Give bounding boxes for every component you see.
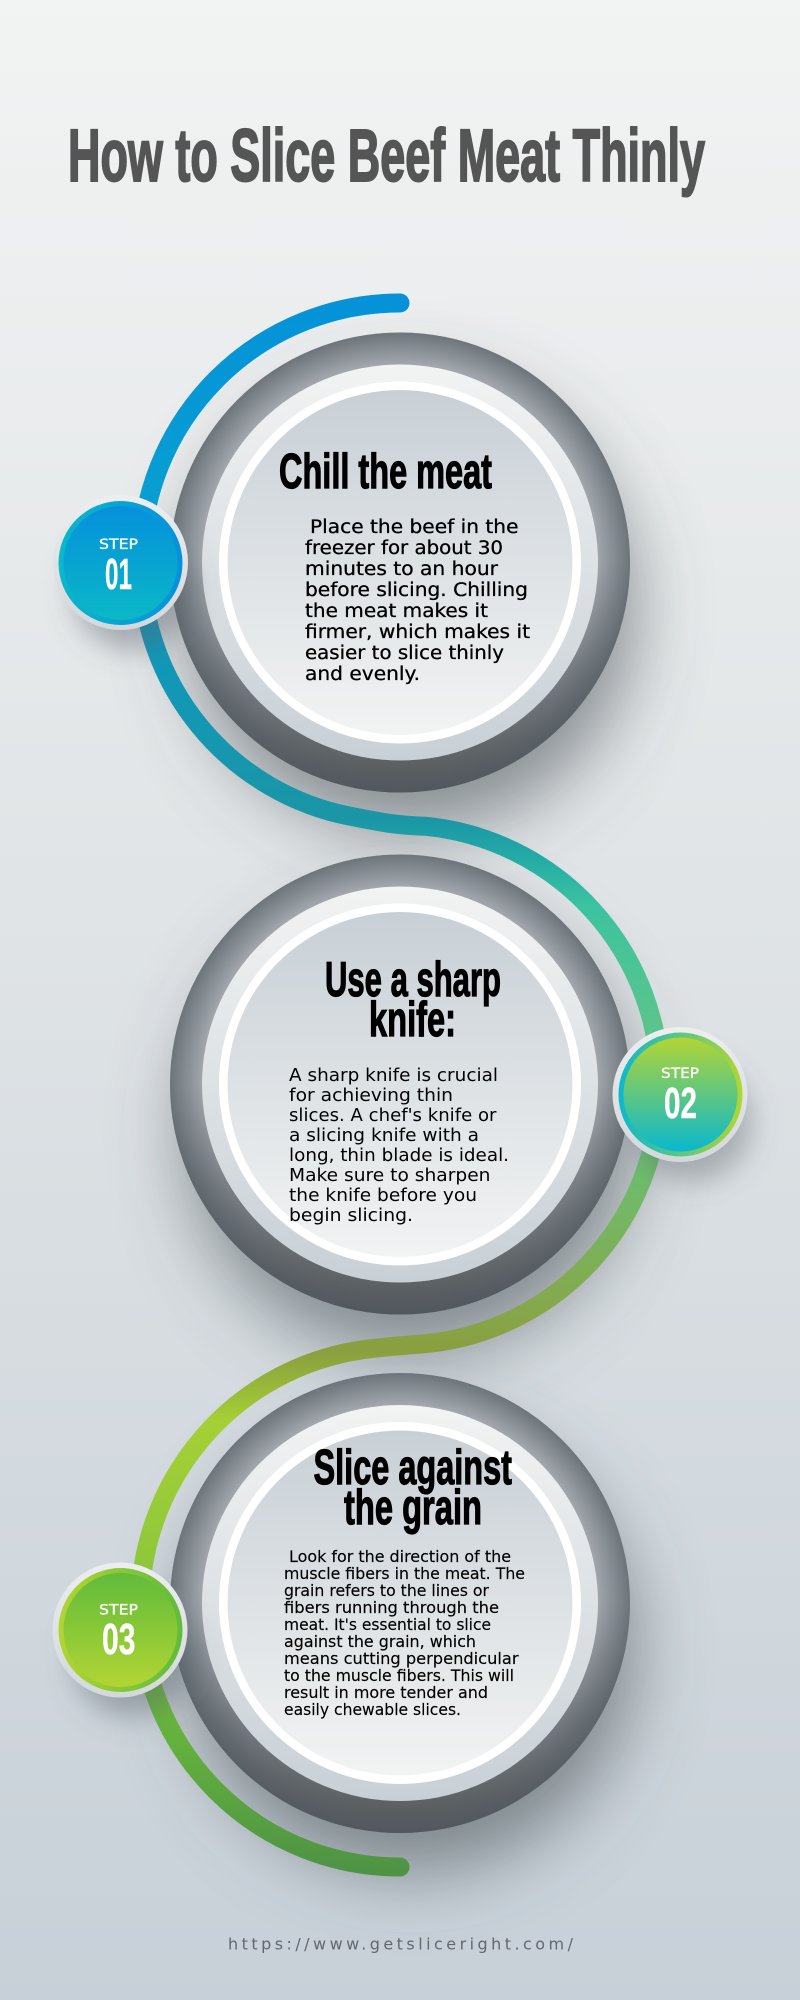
body text 2: slices. A chef's knife or (289, 1105, 497, 1126)
heading 2: knife: (369, 993, 456, 1047)
badge: step 03: STEP (99, 1602, 138, 1618)
panel: step 3 slice against the grain (170, 1373, 630, 1833)
inner disc 3 (228, 1430, 572, 1776)
body text 1: the meat makes it (305, 601, 488, 622)
outer ring 3 (170, 1373, 630, 1833)
body text 2: A sharp knife is crucial (289, 1065, 498, 1086)
panel: step 2 use a sharp knife (170, 854, 630, 1314)
body text 1 (305, 517, 530, 685)
white ring 3 (219, 1422, 581, 1784)
panel: step 1 chill the meat (170, 332, 630, 792)
body text 2: a slicing knife with a (289, 1125, 479, 1146)
heading 2 (325, 953, 501, 1047)
white ring 1 (219, 382, 581, 744)
middle ring 2 (202, 886, 598, 1282)
body text 1: freezer for about 30 (305, 538, 503, 559)
body text 3 (284, 1547, 525, 1719)
body text 2: begin slicing. (289, 1205, 413, 1226)
body text 1: and evenly. (305, 664, 420, 685)
body text 3: fibers running through the (284, 1598, 499, 1617)
badge: step 02 (612, 1027, 752, 1182)
body text 3: against the grain, which (284, 1632, 476, 1651)
inner disc 2 (228, 912, 572, 1257)
connecting gradient path (140, 303, 660, 1867)
body text 3: easily chewable slices. (284, 1700, 461, 1719)
badge: step 03: 03 (102, 1615, 136, 1664)
body text 1: firmer, which makes it (305, 622, 530, 643)
body text 3: Look for the direction of the (289, 1547, 511, 1566)
body text 1: easier to slice thinly (305, 643, 504, 664)
footer url: https://www.getsliceright.com/ (228, 1934, 574, 1954)
badge: step 01: 01 (105, 550, 132, 599)
white ring 2 (219, 904, 581, 1266)
badge: step 01: STEP (99, 537, 138, 553)
badge: step 01 (53, 495, 192, 650)
body text 3: means cutting perpendicular (284, 1649, 519, 1668)
middle ring 1 (202, 364, 598, 760)
body text 2: long, thin blade is ideal. (289, 1145, 509, 1166)
middle ring 3 (202, 1405, 598, 1801)
body text 3: grain refers to the lines or (284, 1581, 489, 1600)
badge: step 02: STEP (661, 1066, 699, 1082)
body text 1: Place the beef in the (310, 517, 518, 538)
body text 1: minutes to an hour (305, 559, 498, 580)
circle drop shadows (185, 382, 635, 1873)
outer ring 1 (170, 332, 630, 792)
body text 2: Make sure to sharpen (289, 1165, 490, 1186)
inner disc 1 (228, 390, 572, 735)
heading 3: the grain (344, 1481, 482, 1535)
body text 3: meat. It's essential to slice (284, 1615, 491, 1634)
body text 2: the knife before you (289, 1185, 477, 1206)
outer ring 2 (170, 854, 630, 1314)
badge: step 02: 02 (664, 1079, 697, 1128)
body text 3: result in more tender and (284, 1683, 488, 1702)
body text 3: muscle fibers in the meat. The (284, 1564, 525, 1583)
body text 1: before slicing. Chilling (305, 580, 528, 601)
heading 3: Slice against (314, 1441, 512, 1495)
heading 3 (314, 1441, 512, 1535)
body text 2: for achieving thin (289, 1085, 453, 1106)
heading 2: Use a sharp (325, 953, 501, 1007)
body text 2 (289, 1065, 509, 1226)
badge: step 03 (52, 1562, 192, 1717)
heading 1: Chill the meat (279, 445, 492, 499)
body text 3: to the muscle fibers. This will (284, 1666, 514, 1685)
